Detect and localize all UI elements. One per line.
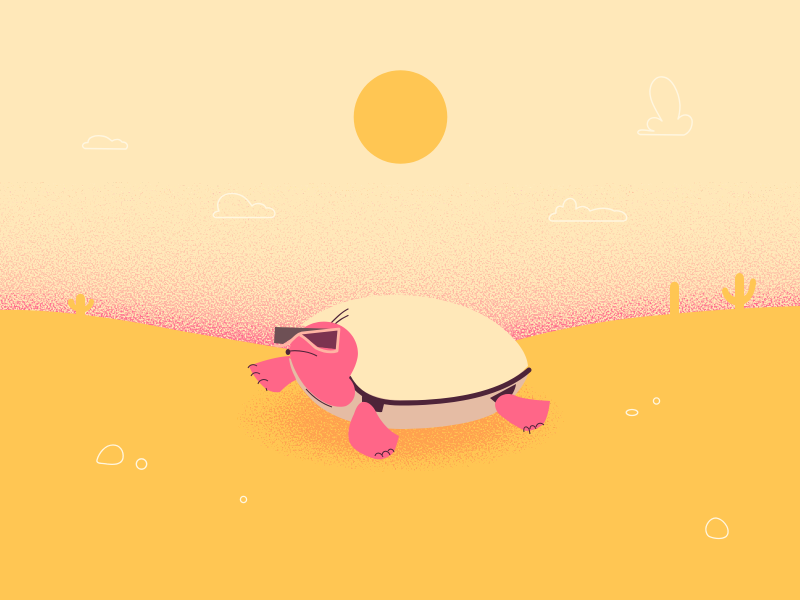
stone: oval right <box>626 410 638 416</box>
grainy shadow under turtle <box>235 363 565 473</box>
head and neck <box>290 322 358 407</box>
stone: tiny <box>240 496 247 503</box>
back leg claws <box>524 423 544 434</box>
back leg <box>495 394 550 431</box>
stone: small round left <box>136 459 147 469</box>
nose <box>286 349 290 355</box>
turtle <box>248 295 550 459</box>
stones <box>97 398 728 538</box>
cloud: middle left <box>213 193 275 218</box>
left front arm <box>249 356 296 392</box>
cactus: left <box>68 294 94 318</box>
mouth <box>290 351 317 356</box>
front leg claws <box>375 449 394 457</box>
turtle shell <box>301 295 528 400</box>
neck line <box>306 389 332 407</box>
frame <box>274 329 339 352</box>
left arm claws <box>248 365 268 391</box>
desert sand <box>0 306 800 600</box>
cloud: middle right <box>549 198 627 221</box>
front leg <box>348 402 399 459</box>
cloud: tall right <box>638 77 692 135</box>
sun <box>354 70 447 164</box>
turtle shell band <box>349 370 529 412</box>
stone: tiny right <box>653 398 660 404</box>
eyelashes <box>331 309 348 325</box>
stone: large left <box>97 445 123 464</box>
neck sliver <box>289 358 345 409</box>
left lens <box>274 327 338 349</box>
sunglasses <box>274 327 339 352</box>
cactus: right <box>722 273 756 315</box>
right lens <box>300 329 338 349</box>
cactus: post <box>670 282 679 325</box>
cloud: small left <box>83 136 127 149</box>
grainy pink horizon haze <box>0 180 800 360</box>
turtle belly <box>289 360 529 429</box>
stone: large right <box>706 518 728 538</box>
